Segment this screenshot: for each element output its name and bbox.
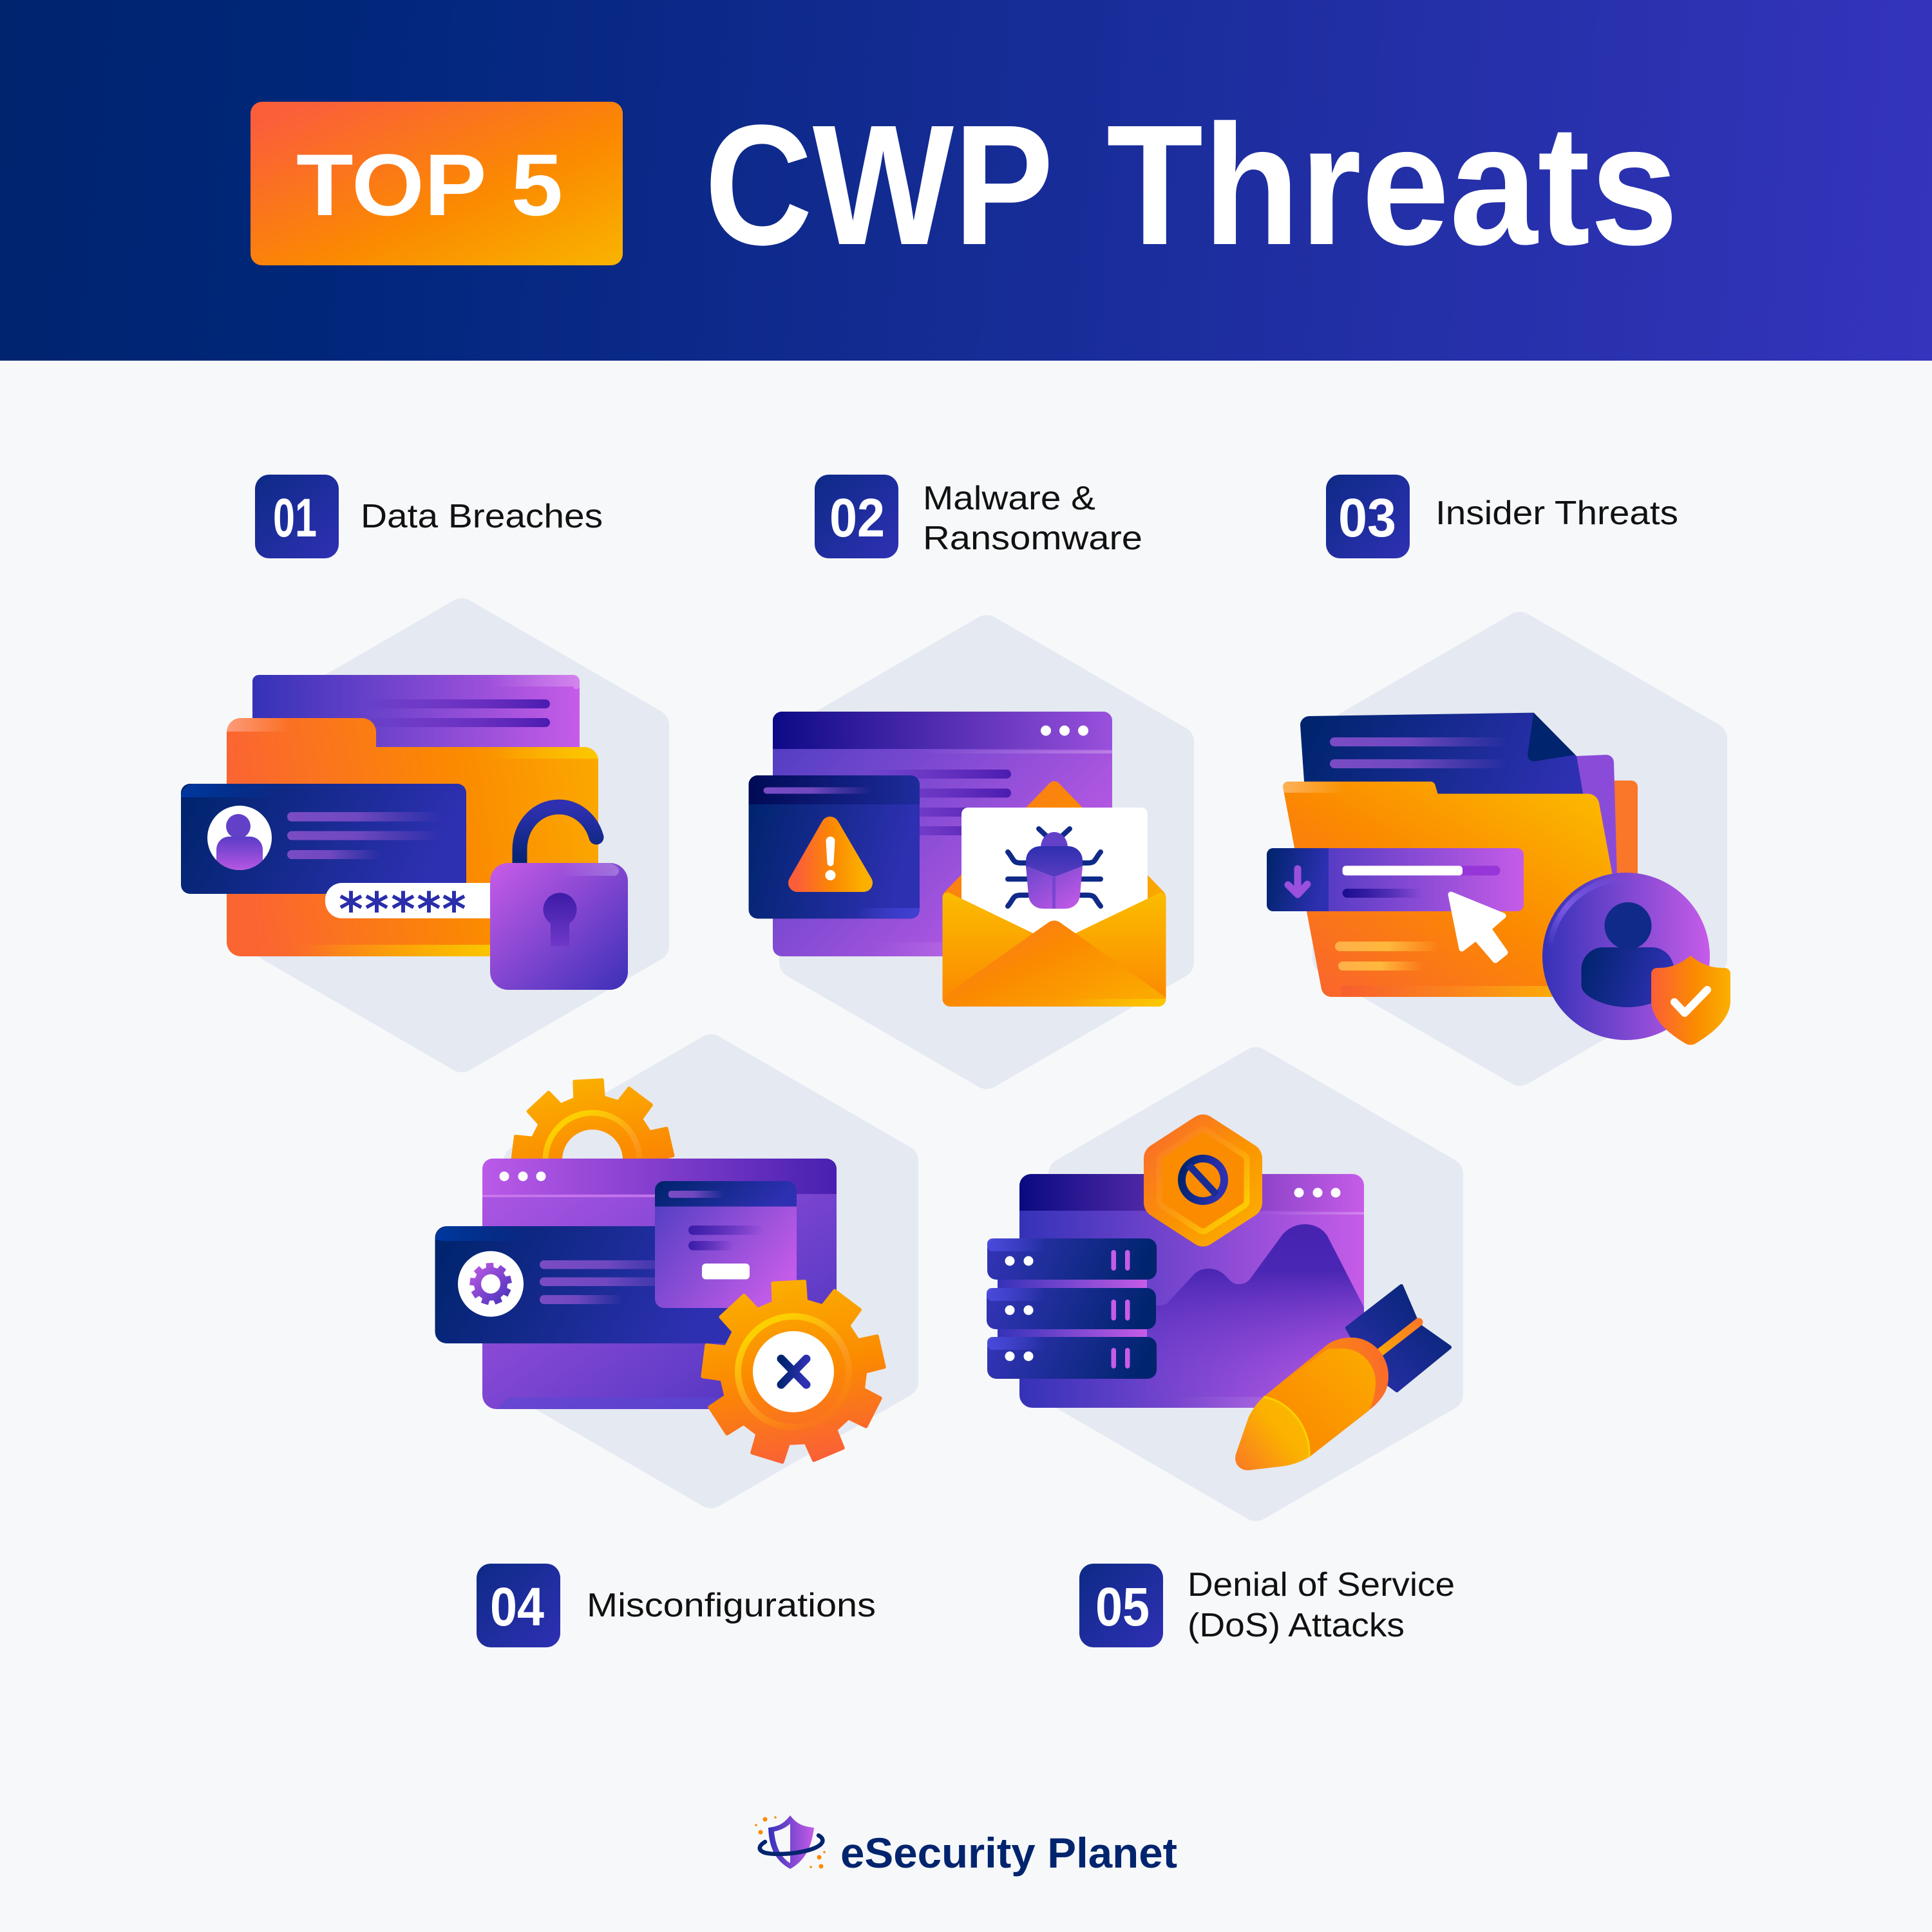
browser window [773, 712, 1112, 956]
logo: eSecurity Planet [755, 1815, 1177, 1877]
icon: small gear [512, 1080, 673, 1240]
small dialog window [655, 1181, 797, 1308]
icon: mouse cursor [1451, 895, 1505, 960]
item heading 05: Denial of Service [1188, 1566, 1455, 1604]
area chart [1153, 1224, 1364, 1379]
orange folder [1283, 782, 1629, 997]
icon: download arrow [1288, 869, 1307, 895]
item heading 05 [1079, 1564, 1455, 1647]
logo: eSecurity Planet: eSecurity Planet [840, 1829, 1177, 1877]
browser window [482, 1159, 837, 1409]
item heading 02: Malware & [923, 480, 1095, 517]
illustration: data breaches [181, 614, 653, 1056]
icon: shield with orbit [755, 1815, 826, 1869]
hexagon backdrop [1065, 1063, 1447, 1505]
envelope sides [942, 893, 1166, 999]
title: CWP [705, 90, 1054, 281]
document [1300, 713, 1591, 837]
server rack [987, 1238, 1157, 1379]
item heading 02 [815, 475, 1142, 558]
item heading 04: Misconfigurations [587, 1587, 876, 1624]
letter paper [961, 808, 1148, 943]
orange folder [227, 718, 598, 956]
browser window with chart [1019, 1174, 1364, 1408]
hexagon backdrop [795, 631, 1178, 1073]
item heading 03: 03 [1338, 488, 1396, 548]
item heading 02: 02 [829, 488, 885, 548]
envelope front flap [943, 920, 1166, 1007]
item heading 02: Ransomware [923, 520, 1142, 557]
hexagon backdrop [520, 1050, 902, 1492]
user circle [1542, 873, 1710, 1040]
server unit 3 [987, 1337, 1157, 1379]
settings card [435, 1226, 738, 1343]
item heading 01: 01 [273, 488, 317, 548]
item heading 04 [477, 1564, 876, 1647]
hexagon backdrop [270, 614, 653, 1056]
server unit 2 [987, 1288, 1156, 1329]
icon: warning triangle [797, 826, 864, 883]
item heading 04: 04 [490, 1577, 544, 1637]
avatar [207, 806, 272, 876]
item heading 03 [1326, 475, 1678, 558]
download progress card [1267, 848, 1524, 911]
server unit 1 [987, 1238, 1157, 1280]
header banner [0, 0, 1932, 361]
icon: error gear [703, 1282, 884, 1462]
icon: envelope with bug letter [942, 788, 1166, 1007]
illustration: denial of service [987, 1063, 1450, 1505]
item heading 01 [255, 475, 603, 558]
title: Threats [1106, 90, 1678, 281]
hexagon backdrop [1329, 628, 1711, 1070]
icon: settings gear [458, 1251, 524, 1317]
item heading 05: 05 [1095, 1577, 1150, 1637]
title [705, 90, 1678, 281]
illustration: misconfigurations [435, 1050, 902, 1492]
icon: rocket missile [1235, 1286, 1450, 1470]
item heading 03: Insider Threats [1435, 495, 1678, 532]
password field: ***** [339, 882, 466, 936]
illustration: malware and ransomware [748, 631, 1178, 1073]
profile card [181, 784, 466, 894]
alert window [748, 775, 920, 918]
icon: open padlock [490, 807, 628, 990]
icon: shield check [1651, 956, 1730, 1045]
back sheet [252, 675, 580, 773]
item heading 05: (DoS) Attacks [1188, 1607, 1405, 1644]
item heading 01: Data Breaches [361, 498, 603, 535]
icon: bug [1008, 829, 1101, 909]
illustration: insider threats [1267, 628, 1730, 1070]
icon: blocked hexagon badge [1144, 1114, 1262, 1247]
top 5 badge [251, 102, 623, 265]
back sheets [1546, 755, 1638, 914]
top 5 badge: TOP 5 [296, 136, 563, 234]
password field [325, 882, 512, 936]
